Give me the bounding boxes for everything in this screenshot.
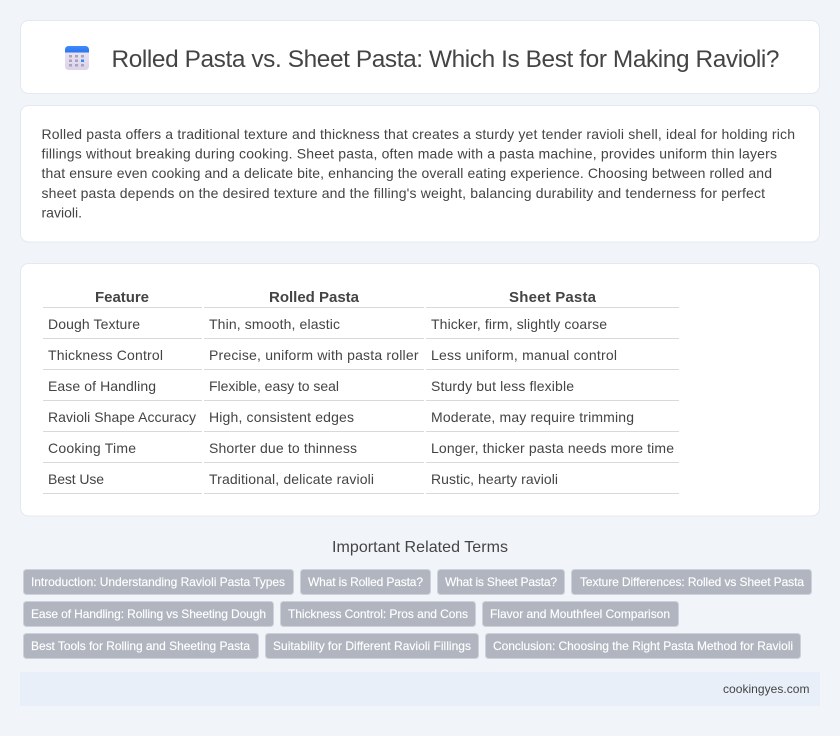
table row: ravioli shape accuracy: Moderate, may require trimming [431,409,634,425]
panel: title header [20,20,820,94]
chip: texture differences: Texture Differences: Rolled vs Sheet Pasta [580,575,804,589]
chip: introduction [24,570,294,594]
table row: cooking time: Shorter due to thinness [209,440,357,456]
related term chips [24,570,812,658]
text block: introduction paragraph: fillings without breaking during cooking. Sheet pasta, often made with a pasta machine, provides uniform thin layers [42,146,777,162]
table header row [95,289,597,306]
icon: calendar [65,46,89,70]
table row: thickness control: Thickness Control [48,347,163,363]
table row: dough texture [48,316,607,332]
chip: best tools [24,634,258,658]
footer source: cookingyes.com [723,682,810,696]
chip: conclusion [486,634,800,658]
text block: introduction paragraph: sheet pasta depends on the desired texture and the filling's weight, balancing durability and tenderness for perfect [42,185,765,201]
table row: ease of handling [48,378,574,394]
table row: thickness control: Less uniform, manual control [431,347,617,363]
chip: ease of handling [24,602,274,626]
table row: cooking time [48,440,674,456]
chip: what is sheet pasta: What is Sheet Pasta? [445,575,557,589]
chip: what is sheet pasta [438,570,564,594]
table row: cooking time: Cooking Time [48,440,136,456]
text block: introduction paragraph: that ensure even cooking and a delicate bite, enhancing the overall eating experience. Choosing between rolled and [42,165,772,181]
text block: introduction paragraph: ravioli. [42,204,82,220]
table row: dough texture: Dough Texture [48,316,140,332]
table header row: Sheet Pasta [509,289,597,306]
table row: ease of handling: Ease of Handling [48,378,156,394]
table row: ease of handling: Flexible, easy to seal [209,378,339,394]
footer bar [20,672,820,706]
table row: thickness control [48,347,617,363]
table row: ease of handling: Sturdy but less flexible [431,378,574,394]
table header row: Feature [95,289,149,306]
chip: introduction: Introduction: Understanding Ravioli Pasta Types [31,575,285,589]
table row: best use: Best Use [48,471,104,487]
chip: flavor and mouthfeel: Flavor and Mouthfeel Comparison [490,607,670,621]
heading: related terms: Important Related Terms [332,539,508,556]
table row: dough texture: Thin, smooth, elastic [209,316,340,332]
table row: best use [48,471,558,487]
chip: best tools: Best Tools for Rolling and Sheeting Pasta [31,639,250,653]
chip: thickness control [280,602,476,626]
table row: dough texture: Thicker, firm, slightly coarse [431,316,607,332]
table row: ravioli shape accuracy: Ravioli Shape Accuracy [48,409,196,425]
chip: suitability: Suitability for Different Ravioli Fillings [273,639,471,653]
chip: thickness control: Thickness Control: Pros and Cons [288,607,468,621]
chip: texture differences [572,570,812,594]
panel: comparison table [20,264,820,516]
text block: introduction paragraph: Rolled pasta offers a traditional texture and thickness that creates a sturdy yet tender ravioli shell, ideal for holding rich [42,126,795,142]
table header row: Rolled Pasta [269,289,360,306]
chip: suitability [266,634,478,658]
chip: what is rolled pasta: What is Rolled Pasta? [308,575,423,589]
chip: what is rolled pasta [300,570,430,594]
panel: introduction text [20,106,820,242]
table row: cooking time: Longer, thicker pasta needs more time [431,440,674,456]
table row: best use: Traditional, delicate ravioli [209,471,374,487]
chip: flavor and mouthfeel [482,602,678,626]
title: Rolled Pasta vs. Sheet Pasta: Which Is Best for Making Ravioli? [112,46,780,73]
text block: introduction paragraph [42,126,795,220]
table row: ravioli shape accuracy [48,409,634,425]
table row: ravioli shape accuracy: High, consistent edges [209,409,354,425]
table row: thickness control: Precise, uniform with pasta roller [209,347,419,363]
table row: best use: Rustic, hearty ravioli [431,471,558,487]
chip: ease of handling: Ease of Handling: Rolling vs Sheeting Dough [31,607,266,621]
chip: conclusion: Conclusion: Choosing the Right Pasta Method for Ravioli [493,639,793,653]
